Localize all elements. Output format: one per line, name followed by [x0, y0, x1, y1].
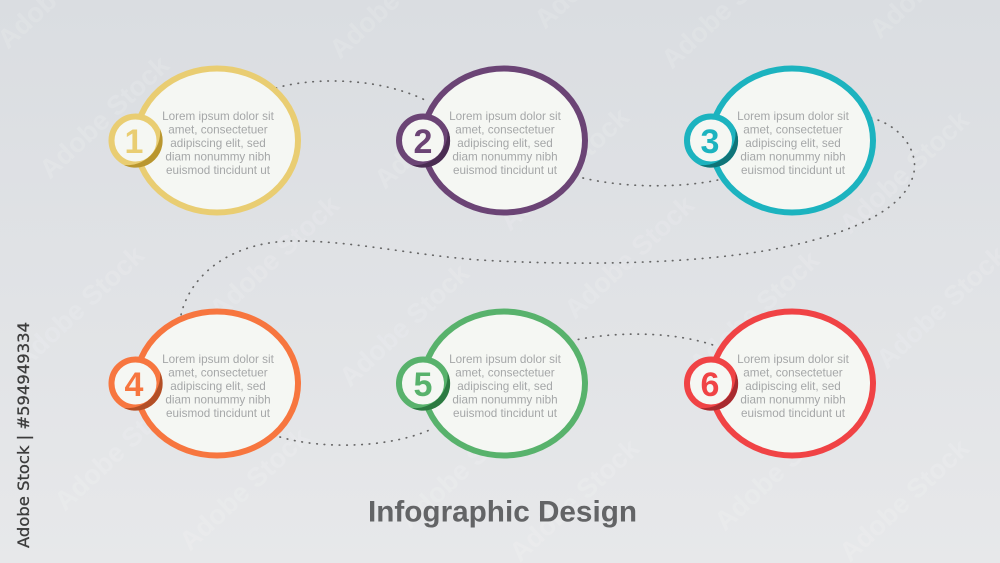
title: Infographic Design: [368, 496, 637, 528]
panel: step 3 ellipse: [711, 68, 873, 212]
icon: number badge 4: 4: [125, 366, 144, 404]
icon: number badge 1: 1: [125, 123, 143, 161]
text: step 6 body: Lorem ipsum dolor sit: [737, 353, 850, 366]
text: step 6 body: amet, consectetuer: [743, 366, 843, 380]
text: step 1 body: euismod tincidunt ut: [166, 164, 271, 177]
icon: number badge 6: [687, 360, 738, 411]
text: Adobe Stock: [494, 101, 635, 236]
text: step 2 body: diam nonummy nibh: [452, 150, 558, 164]
text: step 6 body: diam nonummy nibh: [740, 394, 846, 406]
text: step 3 body: Lorem ipsum dolor sit: [737, 110, 850, 123]
text: Adobe Stock: [394, 399, 535, 534]
dotted connector lines: [181, 81, 915, 445]
text: Adobe Stock: [684, 244, 825, 379]
text: step 1 body: adipiscing elit, sed: [170, 137, 266, 150]
panel: step 5 ellipse: [423, 312, 585, 456]
text: step 5 body: Lorem ipsum dolor sit: [449, 353, 562, 366]
text: step 3 body: euismod tincidunt ut: [741, 164, 846, 177]
icon: number badge 5: 5: [414, 366, 432, 404]
text: Adobe Stock: [834, 104, 975, 239]
icon: number badge 4: [112, 360, 163, 411]
icon: number badge 3: [687, 116, 738, 168]
text: step 3 body: amet, consectetuer: [743, 124, 843, 136]
text: step 2 body: amet, consectetuer: [455, 124, 555, 136]
step 4: [112, 312, 298, 456]
step 1: [112, 68, 298, 212]
icon: number badge 5: [399, 360, 450, 411]
text: step 6 body: adipiscing elit, sed: [745, 380, 841, 393]
text: step 4 body: Lorem ipsum dolor sit: [162, 353, 275, 366]
text: Adobe Stock: [369, 59, 510, 194]
text: step 4 body: euismod tincidunt ut: [166, 407, 271, 420]
text: Adobe Stock: [9, 239, 150, 374]
text: step 1 body: diam nonummy nibh: [165, 150, 271, 164]
text: step 3 body: diam nonummy nibh: [740, 150, 846, 164]
icon: number badge 2: 2: [414, 123, 432, 161]
text: step 2 body: euismod tincidunt ut: [453, 164, 558, 177]
text: Adobe Stock: [334, 257, 475, 392]
icon: number badge 2: [399, 116, 450, 168]
text: step 3 body: adipiscing elit, sed: [745, 137, 841, 150]
text: Adobe Stock: [559, 189, 700, 324]
text: Adobe Stock: [34, 49, 175, 184]
text: Adobe Stock: [204, 189, 345, 324]
step 2: [399, 68, 585, 212]
step 3: [687, 68, 873, 212]
text: step 2 body: Lorem ipsum dolor sit: [449, 110, 562, 123]
step 6: [687, 312, 873, 456]
step 5: [399, 312, 585, 456]
text: Adobe Stock: [49, 381, 190, 516]
text: step 1 body: Lorem ipsum dolor sit: [162, 110, 275, 123]
text: step 4 body: amet, consectetuer: [168, 366, 268, 380]
panel: step 4 ellipse: [136, 312, 298, 456]
panel: step 6 ellipse: [711, 312, 873, 456]
icon: number badge 6: 6: [701, 366, 719, 404]
text: step 5 body: euismod tincidunt ut: [453, 407, 558, 420]
text: step 4 body: adipiscing elit, sed: [170, 380, 266, 393]
text: step 5 body: diam nonummy nibh: [452, 394, 558, 406]
text: step 5 body: adipiscing elit, sed: [457, 380, 553, 393]
text: step 2 body: adipiscing elit, sed: [457, 137, 553, 150]
text: step 4 body: diam nonummy nibh: [165, 394, 271, 406]
text: Adobe Stock: [709, 401, 850, 536]
text: step 6 body: euismod tincidunt ut: [741, 407, 846, 420]
stock id label: Adobe Stock | #594949334: [14, 322, 33, 548]
panel: step 1 ellipse: [136, 68, 298, 212]
text: step 1 body: amet, consectetuer: [168, 124, 268, 136]
text: step 5 body: amet, consectetuer: [455, 366, 555, 380]
icon: number badge 1: [112, 116, 163, 168]
panel: step 2 ellipse: [423, 68, 585, 212]
text: Adobe Stock: [174, 421, 315, 556]
icon: number badge 3: 3: [701, 123, 719, 161]
